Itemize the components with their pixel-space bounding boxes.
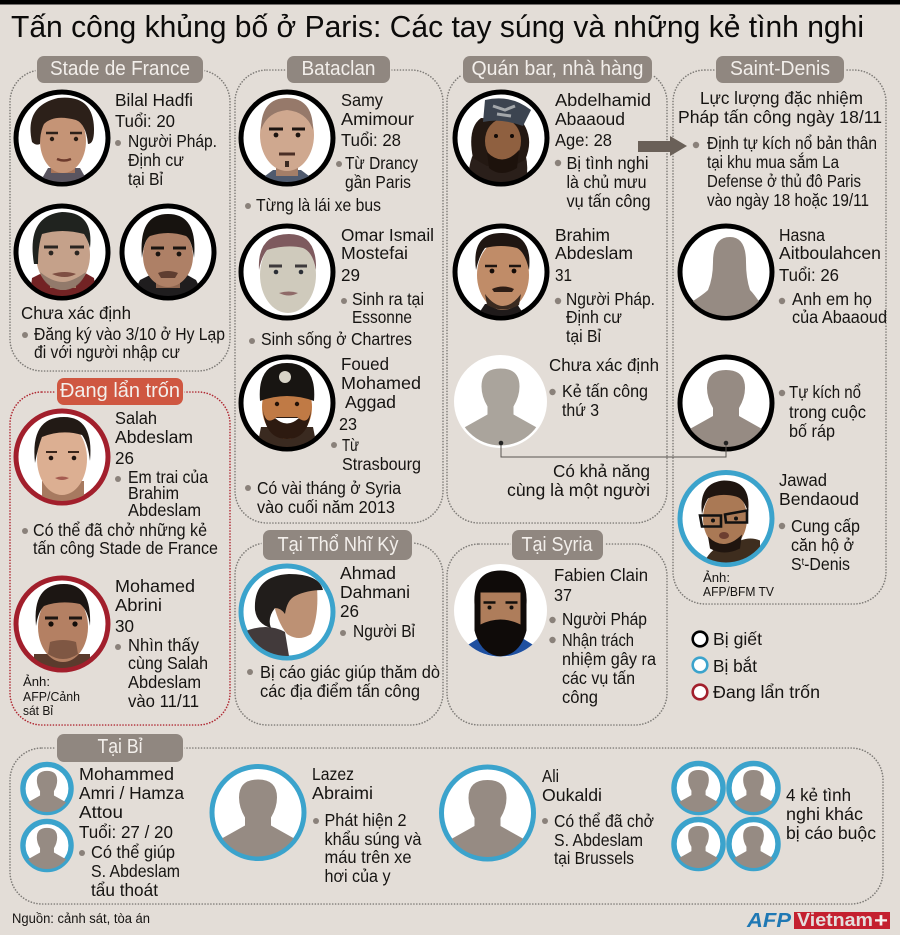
text: Mohammed Amri / Hamza Attou: Amri / Hamza [79,783,184,803]
text: Salah Abdeslam: Có thể đã chở những kẻ [33,520,207,540]
text: Bilal Hadfi: Người Pháp. [128,131,217,151]
portrait: third attacker unidentified [454,355,547,452]
text: Ali Oukaldi [542,766,654,868]
text: Abdelhamid Abaaoud: vụ tấn công [566,191,650,211]
portrait: Mohamed Abrini [16,578,108,670]
text: Salah Abdeslam: Salah [115,408,157,428]
panel: Stade de France [10,56,230,371]
text: Jawad Bendaoud: t [802,557,804,568]
text: Mohamed Abrini: Nhìn thấy [128,635,199,655]
text: Fabien Clain [549,565,656,707]
text: Bilal Hadfi: Bilal Hadfi [115,90,193,110]
text: four other suspects: bị cáo buộc [786,823,876,843]
photo credit: AFP/Cảnh sát Bỉ: sát Bỉ [23,704,53,718]
text: Abdelhamid Abaaoud: là chủ mưu [566,172,646,192]
text: unidentified attackers [21,303,225,362]
portrait: Bilal Hadfi [16,92,108,184]
arrow: Abaaoud to Saint-Denis [638,136,687,156]
text: Mohamed Abrini [115,576,208,711]
text: Samy Amimour: gần Paris [345,172,411,192]
text: Lazez Abraimi: Abraimi [312,783,373,803]
text: blew herself up: bố ráp [789,421,835,441]
text: Jawad Bendaoud: -Denis [804,554,850,574]
text: Samy Amimour: Tuổi: 28 [341,130,401,150]
text: Foued Mohamed Aggad: Aggad [345,392,396,412]
text: Omar Ismail Mostefai: 29 [341,265,360,285]
text: Mohamed Abrini: cùng Salah [128,653,208,673]
text: unidentified attackers: Chưa xác định [21,303,131,323]
text: Brahim Abdeslam: Định cư [566,307,622,327]
text: Brahim Abdeslam [555,225,655,346]
text: Ali Oukaldi: Oukaldi [542,785,602,805]
text: Omar Ismail Mostefai: Essonne [352,307,412,327]
text: Ahmad Dahmani [247,563,440,701]
portrait: Fabien Clain [454,564,547,657]
text: Fabien Clain: Fabien Clain [554,565,648,585]
heading: Tại Thổ Nhĩ Kỳ: Tại Thổ Nhĩ Kỳ [278,534,398,556]
text: Mohammed Amri / Hamza Attou: Có thể giúp [91,842,175,862]
panel: Đang lẩn trốn [10,378,230,725]
text: Brahim Abdeslam: Người Pháp. [566,289,655,309]
text: Salah Abdeslam: Abdeslam [115,427,193,447]
portrait: Ali Oukaldi [442,767,534,863]
panel: Bataclan [235,56,443,523]
text: Hasna Aitboulahcen: Hasna [779,225,825,245]
portrait: unidentified attacker 1 [16,206,108,298]
portrait: Foued Mohamed Aggad [241,357,333,449]
connector: possibly the same person [499,441,728,457]
legend [693,629,820,702]
text: Abdelhamid Abaaoud: Age: 28 [555,130,612,150]
photo credit: AFP/Cảnh sát Bỉ: AFP/Cảnh [23,690,80,704]
text: Samy Amimour: Samy [341,90,383,110]
text: four other suspects: nghi khác [786,804,863,824]
panel: Saint-Denis [673,56,887,604]
text: Brahim Abdeslam: Abdeslam [555,243,633,263]
text: third attacker: thứ 3 [562,400,599,420]
logo: Vietnam+ [794,910,890,932]
text: Mohamed Abrini: 30 [115,616,134,636]
portrait: Abdelhamid Abaaoud [455,92,547,184]
panel: Tại Bỉ [10,734,883,904]
text: Abdelhamid Abaaoud [555,90,651,211]
text: Lazez Abraimi: Lazez [312,764,354,784]
heading: Tại Bỉ: Tại Bỉ [98,736,143,758]
text: Omar Ismail Mostefai [249,225,434,349]
text: Jawad Bendaoud [779,470,860,574]
text: Salah Abdeslam: tấn công Stade de France [33,538,218,558]
text: Omar Ismail Mostefai: Omar Ismail [341,225,434,245]
heading: Tại Bỉ [57,734,183,762]
text: Ahmad Dahmani: các địa điểm tấn công [260,681,420,701]
portrait: Samy Amimour [241,92,333,184]
text: Jawad Bendaoud: Bendaoud [779,489,859,509]
portrait: Jawad Bendaoud [680,472,772,564]
text: Samy Amimour: Amimour [341,109,414,129]
text: Mohammed Amri / Hamza Attou: Attou [79,802,123,822]
text: Jawad Bendaoud: S [791,554,803,574]
text: possibly the same person [507,461,650,500]
heading: Saint-Denis: Saint-Denis [730,58,830,80]
text: Hasna Aitboulahcen: của Abaaoud [792,307,887,327]
text: four other suspects [786,785,876,843]
text: Ahmad Dahmani: 26 [340,601,359,621]
text: Ali Oukaldi: tại Brussels [554,848,634,868]
text: planned La Defense attack: tại khu mua sắm La [707,151,839,172]
text: Jawad Bendaoud: Cung cấp [791,516,860,536]
portrait: Ahmad Dahmani [241,566,333,658]
text: Jawad Bendaoud: Jawad [779,470,827,490]
logo: Vietnam+: + [874,910,888,932]
portrait: Hamza Attou [22,821,72,872]
text: Foued Mohamed Aggad: Mohamed [341,373,421,393]
text: Mohamed Abrini: Mohamed [115,576,195,596]
text: Fabien Clain: nhiệm gây ra [562,649,656,669]
heading: Đang lẩn trốn: Đang lẩn trốn [60,380,180,402]
text: planned La Defense attack: vào ngày 18 hoặc 19/11 [707,190,869,210]
text: unidentified attackers: Đăng ký vào 3/10 ở Hy Lạp [34,324,225,344]
text: Ahmad Dahmani: Người Bỉ [353,621,415,641]
text: Abdelhamid Abaaoud: Abaaoud [555,109,625,129]
panel: Tại Syria [447,530,667,725]
text: French special forces raid: Lực lượng đặc nhiệm [700,88,863,108]
text: Lazez Abraimi: Phát hiện 2 [324,810,406,830]
text: third attacker: Kẻ tấn công [562,381,648,401]
text: Mohammed Amri / Hamza Attou [79,764,184,900]
text: Fabien Clain: Người Pháp [562,609,647,629]
text: Lazez Abraimi [312,764,422,886]
text: Foued Mohamed Aggad [245,354,421,517]
text: Mohammed Amri / Hamza Attou: tẩu thoát [91,880,158,900]
panel: Quán bar, nhà hàng [447,56,667,523]
text: Fabien Clain: công [562,687,598,707]
text: third attacker: Chưa xác định [549,355,659,375]
text: Foued Mohamed Aggad: 23 [339,414,357,434]
text: Mohammed Amri / Hamza Attou: Tuổi: 27 / 20 [79,822,173,842]
text: Abdelhamid Abaaoud: Abdelhamid [555,90,651,110]
text: Lazez Abraimi: hơi của y [324,866,391,886]
heading: Bataclan: Bataclan [302,58,376,80]
legend: Bị bắt [713,655,757,676]
heading: Tại Thổ Nhĩ Kỳ [263,530,412,560]
text: Bilal Hadfi: Tuổi: 20 [115,111,175,131]
heading: Tại Syria: Tại Syria [522,534,593,556]
heading: Bataclan [287,56,390,83]
text: Samy Amimour: Từng là lái xe bus [256,195,381,215]
text: possibly the same person: Có khả năng [553,461,650,481]
text: Foued Mohamed Aggad: Từ [342,435,359,455]
legend: Bị giết [713,629,762,649]
heading: Stade de France: Stade de France [50,58,190,80]
portrait: Mohammed Amri [22,764,72,815]
text: Ahmad Dahmani: Ahmad [340,563,396,583]
legend: Đang lẩn trốn [713,682,820,702]
text: Lazez Abraimi: máu trên xe [324,847,412,867]
text: Fabien Clain: Nhận trách [562,630,634,650]
text: Hasna Aitboulahcen [779,225,887,327]
text: blew herself up [779,382,866,441]
portrait: Lazez Abraimi [212,766,304,862]
text: Ali Oukaldi: Có thể đã chở [554,811,654,831]
text: Fabien Clain: 37 [554,585,572,605]
text: Ali Oukaldi: S. Abdeslam [554,830,643,850]
text: Mohammed Amri / Hamza Attou: S. Abdeslam [91,861,180,881]
text: Samy Amimour [245,90,418,215]
text: Foued Mohamed Aggad: Strasbourg [342,454,421,474]
icons: four other suspects [673,763,779,871]
text: Samy Amimour: Từ Drancy [345,153,418,173]
text: planned La Defense attack [693,133,877,210]
text: planned La Defense attack: Định tự kích nổ bản thân [707,133,877,153]
photo credit: AFP/BFM TV: AFP/BFM TV [703,585,775,599]
logo: AFP: AFP [746,910,792,932]
text: Ahmad Dahmani: Bị cáo giác giúp thăm dò [260,662,440,682]
photo credit: AFP/Cảnh sát Bỉ [23,674,80,718]
photo credit: AFP/BFM TV [703,570,775,599]
text: Bilal Hadfi: Định cư [128,150,184,170]
photo credit: AFP/BFM TV: Ảnh: [703,570,730,585]
text: Brahim Abdeslam: 31 [555,265,572,285]
text: Omar Ismail Mostefai: Mostefai [341,243,408,263]
text: Mohamed Abrini: vào 11/11 [128,691,199,711]
text: Foued Mohamed Aggad: Foued [341,354,389,374]
portrait: Brahim Abdeslam [455,226,547,318]
text: Brahim Abdeslam: Brahim [555,225,610,245]
panel: Tại Thổ Nhĩ Kỳ [235,530,443,725]
heading: Quán bar, nhà hàng: Quán bar, nhà hàng [472,58,644,80]
text: French special forces raid [678,88,882,127]
text: Ali Oukaldi: Ali [542,766,559,786]
photo credit: AFP/Cảnh sát Bỉ: Ảnh: [23,674,50,689]
text: Mohamed Abrini: Abdeslam [128,672,201,692]
text: planned La Defense attack: Defense ở thủ đô Paris [707,171,861,191]
text: Salah Abdeslam: Abdeslam [128,500,201,520]
text: Bilal Hadfi [115,90,217,189]
text: Salah Abdeslam: 26 [115,448,134,468]
text: Hasna Aitboulahcen: Anh em họ [792,289,872,309]
heading: Tại Syria [512,530,603,560]
text: Fabien Clain: các vụ tấn [562,668,635,688]
text: unidentified attackers: đi với người nhập cư [34,342,180,362]
text: Hasna Aitboulahcen: Tuổi: 26 [779,265,839,285]
text: Bilal Hadfi: tại Bỉ [128,169,163,189]
portrait: unidentified attacker 2 [122,206,214,298]
text: Omar Ismail Mostefai: Sinh ra tại [352,289,424,309]
portrait: Hasna Aitboulahcen [680,226,772,322]
text: four other suspects: 4 kẻ tình [786,785,851,805]
text: blew herself up: Tự kích nổ [789,382,861,402]
text: Salah Abdeslam [22,408,218,558]
text: Hasna Aitboulahcen: Aitboulahcen [779,243,881,263]
portrait: Omar Ismail Mostefai [241,226,333,318]
text: Jawad Bendaoud: căn hộ ở [791,535,854,555]
text: Salah Abdeslam: Brahim [128,483,179,503]
text: possibly the same person: cùng là một người [507,480,650,500]
text: Foued Mohamed Aggad: vào cuối năm 2013 [257,497,395,517]
text: French special forces raid: Pháp tấn công ngày 18/11 [678,107,882,127]
text: Mohamed Abrini: Abrini [115,595,162,615]
text: Mohammed Amri / Hamza Attou: Mohammed [79,764,174,784]
text: Lazez Abraimi: khẩu súng và [324,829,422,849]
heading: Saint-Denis [716,56,844,83]
text: third attacker [549,355,659,420]
portrait: Salah Abdeslam [16,411,108,503]
text: Ahmad Dahmani: Dahmani [340,582,410,602]
title: Tấn công khủng bố ở Paris: Các tay súng và những kẻ tình nghi [11,9,864,44]
text: Salah Abdeslam: Em trai của [128,467,208,487]
top black bar [0,0,900,4]
logo: Vietnam+: Vietnam [797,910,873,930]
text: Foued Mohamed Aggad: Có vài tháng ở Syria [257,478,401,498]
text: Omar Ismail Mostefai: Sinh sống ở Chartres [261,329,412,349]
text: Abdelhamid Abaaoud: Bị tình nghi [566,153,648,173]
source note: Nguồn: cảnh sát, tòa án [12,911,150,926]
text: blew herself up: trong cuộc [789,402,866,422]
text: Brahim Abdeslam: tại Bỉ [566,326,601,346]
portrait: unidentified Saint-Denis suspect [680,357,772,453]
